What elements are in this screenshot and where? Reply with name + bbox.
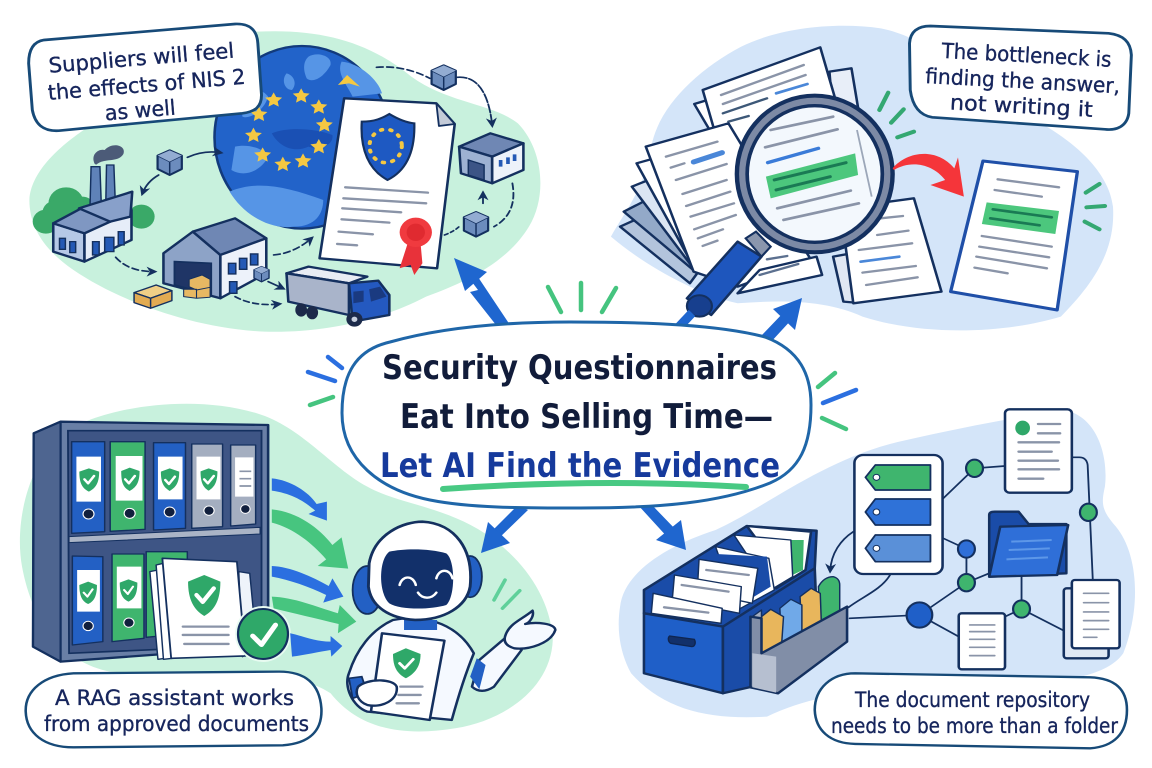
dashed flow arrows [116,67,513,305]
title bubble [342,322,811,508]
title sparks [308,283,856,429]
callout text: RAG assistant [44,686,309,736]
callout outline [910,26,1131,130]
background blob: green [29,31,540,332]
title line 3: Let AI Find the Evidence [380,446,780,486]
green sparks [879,93,1105,229]
background blob: green [20,404,553,732]
scene: bookcase and robot [20,404,555,747]
callout text: bottleneck: finding the answer, [925,64,1121,98]
title line 2: Eat Into Selling Time— [400,397,773,437]
binders: top shelf [72,442,256,533]
callout text: repository: needs to be more than a folder [831,714,1118,738]
arrow: magnifier connector [676,313,692,330]
callout outline [26,672,321,747]
callout text: suppliers: the effects of NIS 2 [47,65,246,105]
bubble outline [342,322,811,508]
callout outline [29,24,262,131]
red arrow [893,154,964,197]
scene: documents and magnifier [611,26,1131,330]
panel: document repository [619,409,1135,748]
callout text: RAG assistant: from approved documents [44,712,309,736]
certificate with shield and seal [320,98,455,275]
approved document stack [150,558,257,659]
background blob: blue [619,410,1135,717]
top document [1005,409,1072,493]
callout text: RAG assistant: A RAG assistant works [55,686,294,710]
title line 1: Security Questionnaires [382,348,777,388]
scene: file box and network [619,409,1135,748]
callout text: bottleneck: The bottleneck is [940,39,1112,72]
network links [830,457,1093,637]
cubes [158,65,488,282]
callout outline [815,673,1127,748]
arrow: to repository panel [638,503,686,550]
magnifying glass [687,96,893,317]
panel: RAG assistant [20,404,555,747]
binders: bottom shelf [72,552,187,645]
arrow: to suppliers panel [454,258,510,330]
flow arrows [272,478,356,657]
network documents [959,580,1120,669]
callout text: suppliers: Suppliers will feel [48,39,235,78]
tag panel [854,455,943,574]
tabbed tray [750,577,847,693]
callout text: suppliers: as well [104,96,177,125]
truck [286,267,389,327]
panel: bottleneck [611,26,1131,330]
check badge [235,606,291,662]
factory [33,145,155,262]
callout text: bottleneck: not writing it [949,90,1093,122]
title underline [443,483,746,489]
warehouse with boxes [134,218,266,308]
result document [951,161,1077,310]
callout text: repository [831,688,1118,738]
callout text: bottleneck [923,38,1122,123]
callout text: repository: The document repository [854,688,1090,712]
callout text: suppliers [45,38,248,130]
robot [347,522,555,720]
globe with EU stars [215,46,389,229]
scene: supply chain illustration [29,24,540,332]
background blob: blue [611,26,1113,330]
small warehouse [459,133,523,183]
panel: suppliers and NIS 2 [29,24,540,332]
arrow: to RAG panel [481,505,528,553]
folder [989,512,1068,577]
file box [644,526,817,693]
network nodes [907,460,1097,628]
arrow: to bottleneck panel [761,298,802,343]
document stack [620,47,941,303]
bookcase [33,422,268,662]
